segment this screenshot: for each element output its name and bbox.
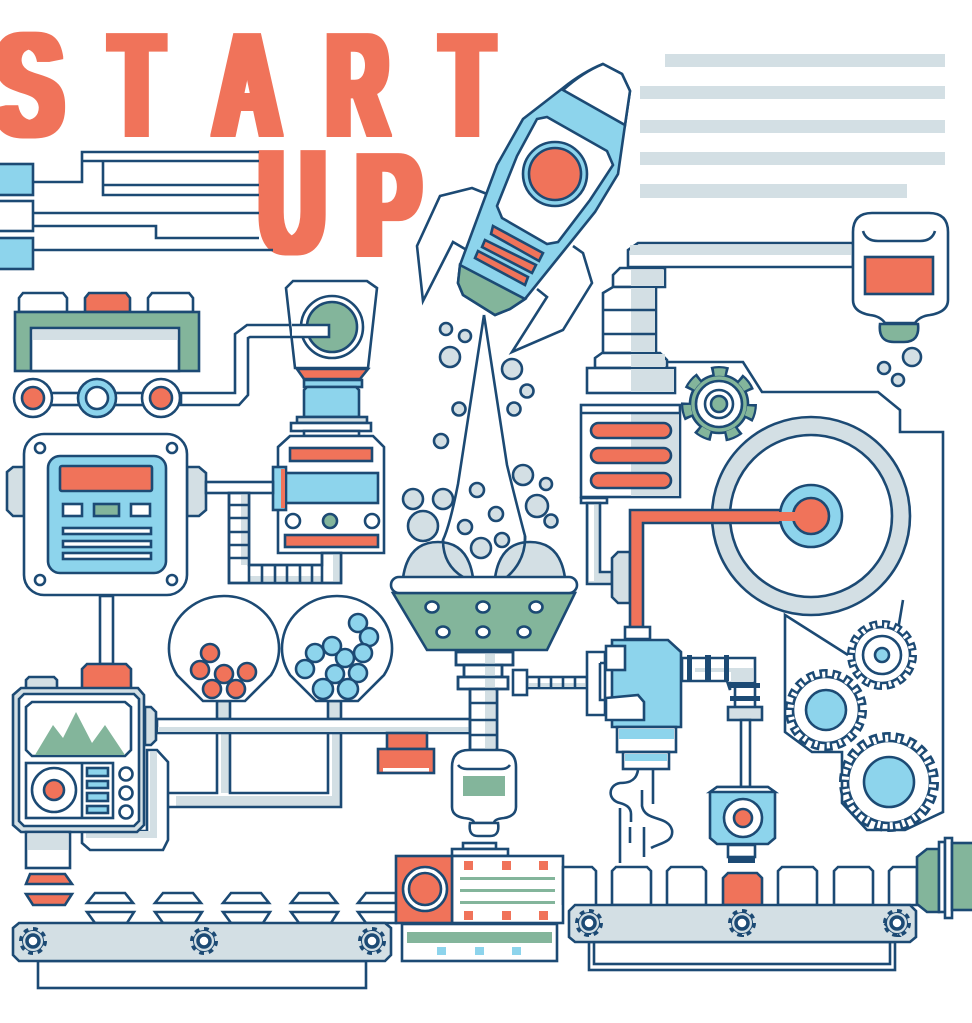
central blue press (513, 627, 681, 769)
title: START UP: U (259, 121, 325, 285)
piston column (581, 268, 680, 603)
title: START UP: P (356, 123, 420, 288)
ball bulbs (169, 596, 392, 719)
small gear (360, 929, 384, 953)
top-right tank and pipe (628, 213, 948, 386)
exhaust beam (443, 315, 525, 577)
pipes (176, 733, 340, 806)
rear bracket (82, 750, 168, 850)
circuit connectors to title (0, 152, 273, 269)
panel: cart with wheels (14, 293, 328, 417)
elbow coupling and sensor (682, 655, 775, 863)
gear: top (851, 624, 913, 686)
fluid drips (611, 770, 672, 863)
central column and bottle (452, 652, 516, 836)
title: START UP: T (442, 3, 493, 168)
rocket (417, 64, 630, 352)
title: START UP: R (327, 2, 388, 168)
coral drive pipe (630, 485, 842, 630)
left conveyor with beads (13, 874, 396, 988)
pipe to camera box (206, 482, 273, 493)
bubbles (403, 323, 558, 558)
small gear (21, 929, 45, 953)
right conveyor with blocks (563, 867, 917, 970)
back plate with big wheel (668, 362, 943, 830)
panel: camera tower (273, 281, 384, 553)
text placeholder bars (640, 54, 945, 198)
small gear (192, 929, 216, 953)
panel: control box (7, 434, 341, 595)
small gear (730, 911, 754, 935)
bottling machine (396, 843, 563, 961)
red button (378, 733, 434, 773)
radiator box (581, 405, 680, 503)
gear: middle (790, 674, 862, 746)
title: START UP: A (214, 4, 280, 168)
small gear (885, 911, 909, 935)
gear: bottom (844, 737, 934, 827)
pipe from cart to camera (181, 325, 328, 405)
meshing gears (790, 624, 934, 827)
chain conveyor (229, 493, 341, 583)
title: START UP: T (111, 2, 163, 168)
side chain pipe (513, 670, 587, 695)
hopper (391, 536, 577, 650)
green end cap (917, 838, 972, 918)
panel: device with mountain screen (13, 596, 470, 868)
small gear (577, 911, 601, 935)
title: START UP (0, 2, 493, 288)
green gear (686, 371, 752, 437)
